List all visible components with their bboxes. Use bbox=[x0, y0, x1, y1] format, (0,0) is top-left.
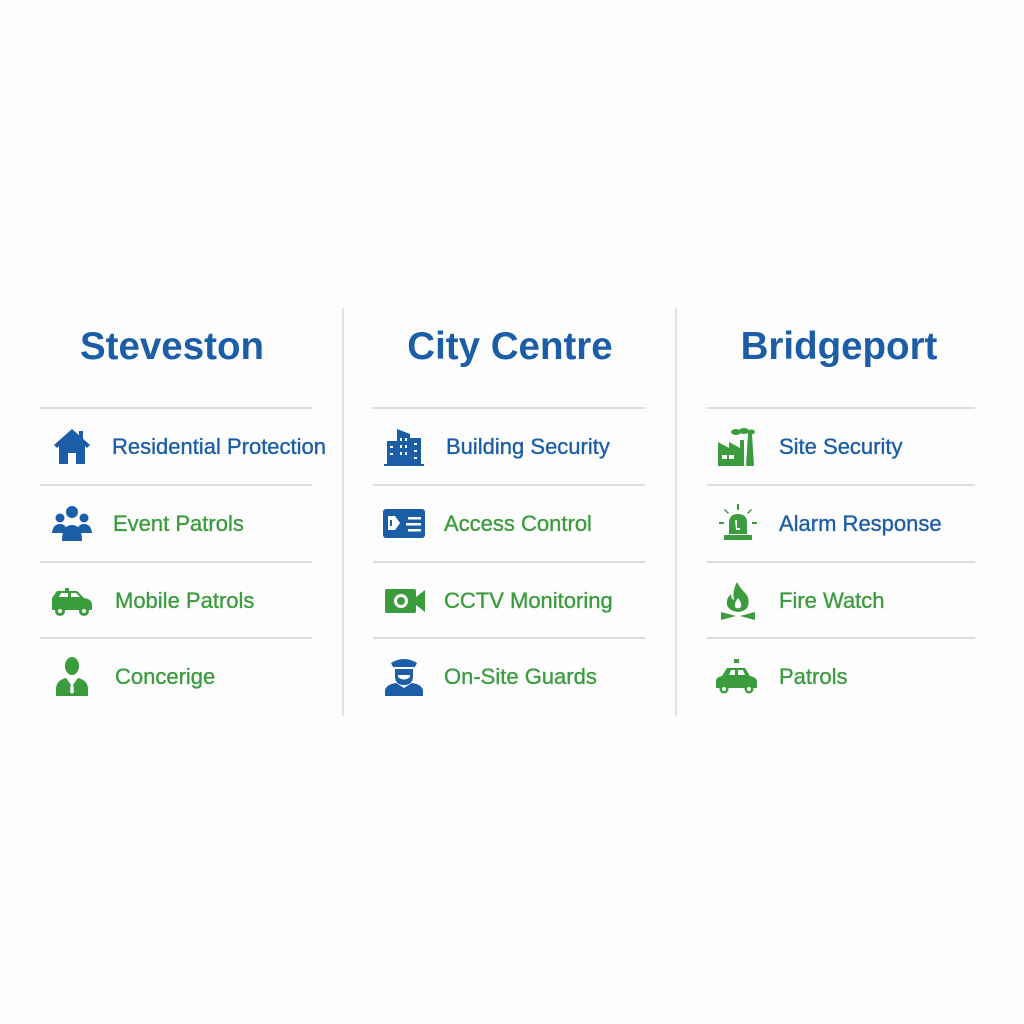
divider: left bbox=[342, 308, 344, 716]
panel: Bridgeport bbox=[707, 325, 975, 694]
item: Mobile Patrols: Mobile Patrols bbox=[115, 588, 254, 613]
item: Event Patrols: Event Patrols bbox=[113, 511, 244, 536]
item: Residential Protection: Residential Protection bbox=[112, 434, 326, 459]
icon: factory bbox=[718, 428, 755, 466]
item: Site Security: Site Security bbox=[779, 434, 902, 459]
icon: access card bbox=[383, 509, 425, 538]
panel: Steveston bbox=[40, 325, 326, 696]
item: Concierge: Concerige bbox=[115, 664, 215, 689]
heading: Bridgeport: Bridgeport bbox=[741, 325, 937, 368]
icon: patrol car bbox=[716, 659, 757, 694]
heading: Steveston: Steveston bbox=[80, 325, 264, 368]
item: Building Security: Building Security bbox=[446, 434, 610, 459]
panel: City Centre bbox=[373, 325, 645, 696]
icon: concierge person bbox=[56, 657, 88, 696]
icon: guard bbox=[385, 659, 423, 696]
item: Alarm Response: Alarm Response bbox=[779, 511, 942, 536]
icon: house bbox=[54, 429, 90, 464]
item: Patrols: Patrols bbox=[779, 664, 847, 689]
item: On-Site Guards: On-Site Guards bbox=[444, 664, 597, 689]
icon: fire bbox=[721, 582, 755, 620]
icon: cctv camera bbox=[385, 589, 425, 613]
heading: City Centre: City Centre bbox=[407, 325, 613, 368]
icon: buildings bbox=[384, 429, 424, 466]
item: CCTV Monitoring: CCTV Monitoring bbox=[444, 588, 613, 613]
icon: car bbox=[52, 588, 92, 616]
icon: alarm siren bbox=[719, 504, 757, 540]
item: Access Control: Access Control bbox=[444, 511, 592, 536]
icon: people bbox=[52, 506, 92, 541]
item: Fire Watch: Fire Watch bbox=[779, 588, 885, 613]
divider: right bbox=[675, 308, 677, 716]
